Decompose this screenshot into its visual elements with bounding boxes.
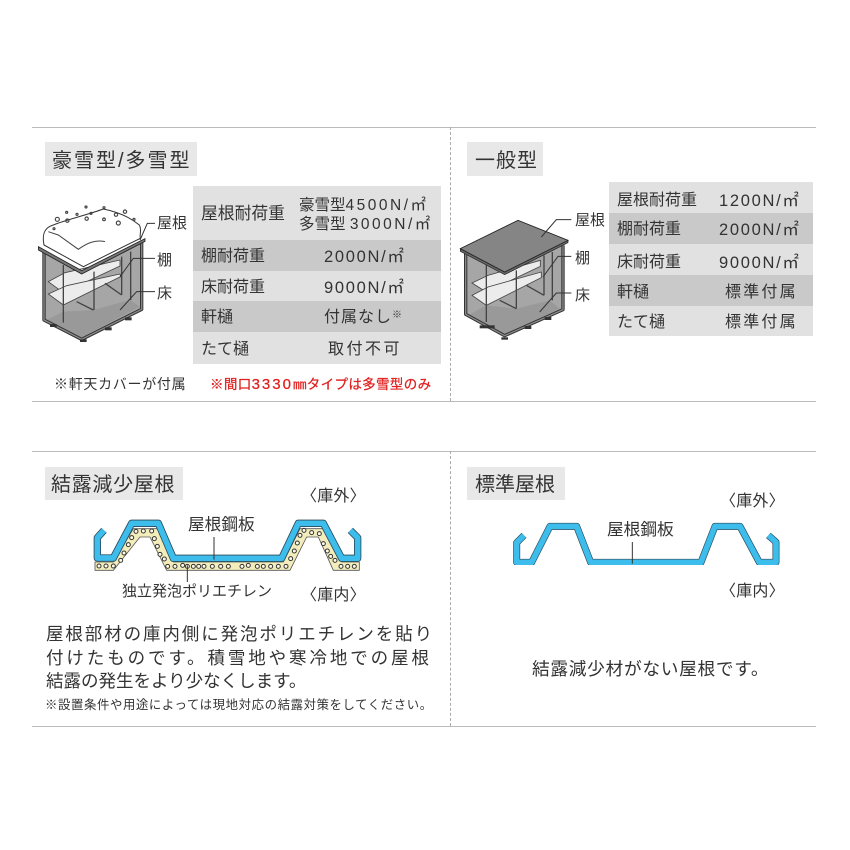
row: floor load: 床耐荷重	[617, 254, 681, 271]
text block: description: 付けたものです。積雪地や寒冷地での屋根	[46, 648, 432, 668]
label: roof steel sheet: 屋根鋼板	[607, 520, 674, 539]
note: soffit cover: ※軒天カバーが付属	[54, 376, 186, 392]
value: floor load: 9000N/㎡	[719, 254, 801, 272]
heading: heavy snow type: 豪雪型/多雪型	[52, 150, 192, 172]
label: roof steel sheet: 屋根鋼板	[188, 515, 255, 534]
label: shelf: 棚	[157, 252, 172, 269]
label: inside: 〈庫内〉	[301, 587, 366, 604]
heading: standard roof	[467, 467, 565, 500]
label: roof: 屋根	[575, 212, 605, 229]
panel: standard roof	[467, 467, 785, 679]
value: downspout: 取付不可	[328, 341, 402, 358]
row: roof load: 屋根耐荷重	[617, 192, 697, 209]
panel: general type	[460, 142, 813, 340]
label: floor: 床	[157, 285, 172, 302]
value: eaves gutter: 付属なし※	[324, 309, 403, 326]
value: shelf load: 2000N/㎡	[324, 248, 406, 266]
row: roof load: 屋根耐荷重	[201, 204, 285, 223]
heading: standard roof: 標準屋根	[475, 474, 555, 496]
footnote: ※設置条件や用途によっては現地対応の結露対策をしてください。	[45, 698, 433, 712]
table: general load specs	[609, 182, 813, 336]
row: eaves gutter: 軒樋	[201, 309, 233, 326]
label: inside: 〈庫内〉	[720, 583, 785, 600]
label: outside: 〈庫外〉	[720, 493, 785, 510]
row: eaves gutter: 軒樋	[617, 284, 649, 301]
value: roof load heavy and multi snow	[299, 196, 433, 233]
label: closed-cell polyethylene foam: 独立発泡ポリエチレン	[122, 583, 272, 600]
panel: condensation reducing roof	[45, 467, 434, 712]
value: roof load: 1200N/㎡	[719, 192, 801, 210]
heading: general type	[467, 142, 543, 176]
value: roof load heavy and multi snow: 多雪型 3000N/㎡	[299, 216, 433, 233]
heading: condensation reducing roof: 結露減少屋根	[51, 474, 175, 496]
text block: description: 結露の発生をより少なくします。	[46, 671, 306, 691]
text block: description	[46, 624, 434, 691]
label: outside: 〈庫外〉	[301, 488, 366, 505]
value: roof load heavy and multi snow: 豪雪型4500N/㎡	[299, 197, 428, 214]
value: downspout: 標準付属	[725, 314, 798, 331]
diagram: standard roof section	[513, 522, 780, 565]
panel: heavy snow type	[38, 142, 441, 393]
label: floor: 床	[575, 287, 590, 304]
row: downspout: たて樋	[617, 314, 665, 331]
icon: storage shed	[460, 219, 572, 340]
row: shelf load: 棚耐荷重	[617, 221, 681, 238]
heading: general type: 一般型	[475, 150, 538, 172]
value: shelf load: 2000N/㎡	[719, 221, 801, 239]
value: eaves gutter: 標準付属	[725, 284, 798, 301]
text block: description: 結露減少材がない屋根です。	[532, 659, 769, 679]
note: red 3330mm width: ※間口3330㎜タイプは多雪型のみ	[210, 376, 431, 393]
icon: storage shed with snow on roof	[38, 205, 155, 342]
row: shelf load: 棚耐荷重	[201, 248, 265, 265]
row: floor load: 床耐荷重	[201, 279, 265, 296]
row: downspout: たて樋	[201, 341, 249, 358]
diagram: roof section with foam	[94, 520, 362, 582]
label: roof: 屋根	[157, 215, 187, 232]
heading: heavy snow type	[45, 142, 197, 176]
text block: description: 屋根部材の庫内側に発泡ポリエチレンを貼り	[46, 624, 434, 644]
value: floor load: 9000N/㎡	[324, 279, 406, 297]
heading: condensation reducing roof	[45, 467, 183, 500]
label: shelf: 棚	[575, 250, 590, 267]
table: heavy snow load specs	[193, 186, 441, 364]
